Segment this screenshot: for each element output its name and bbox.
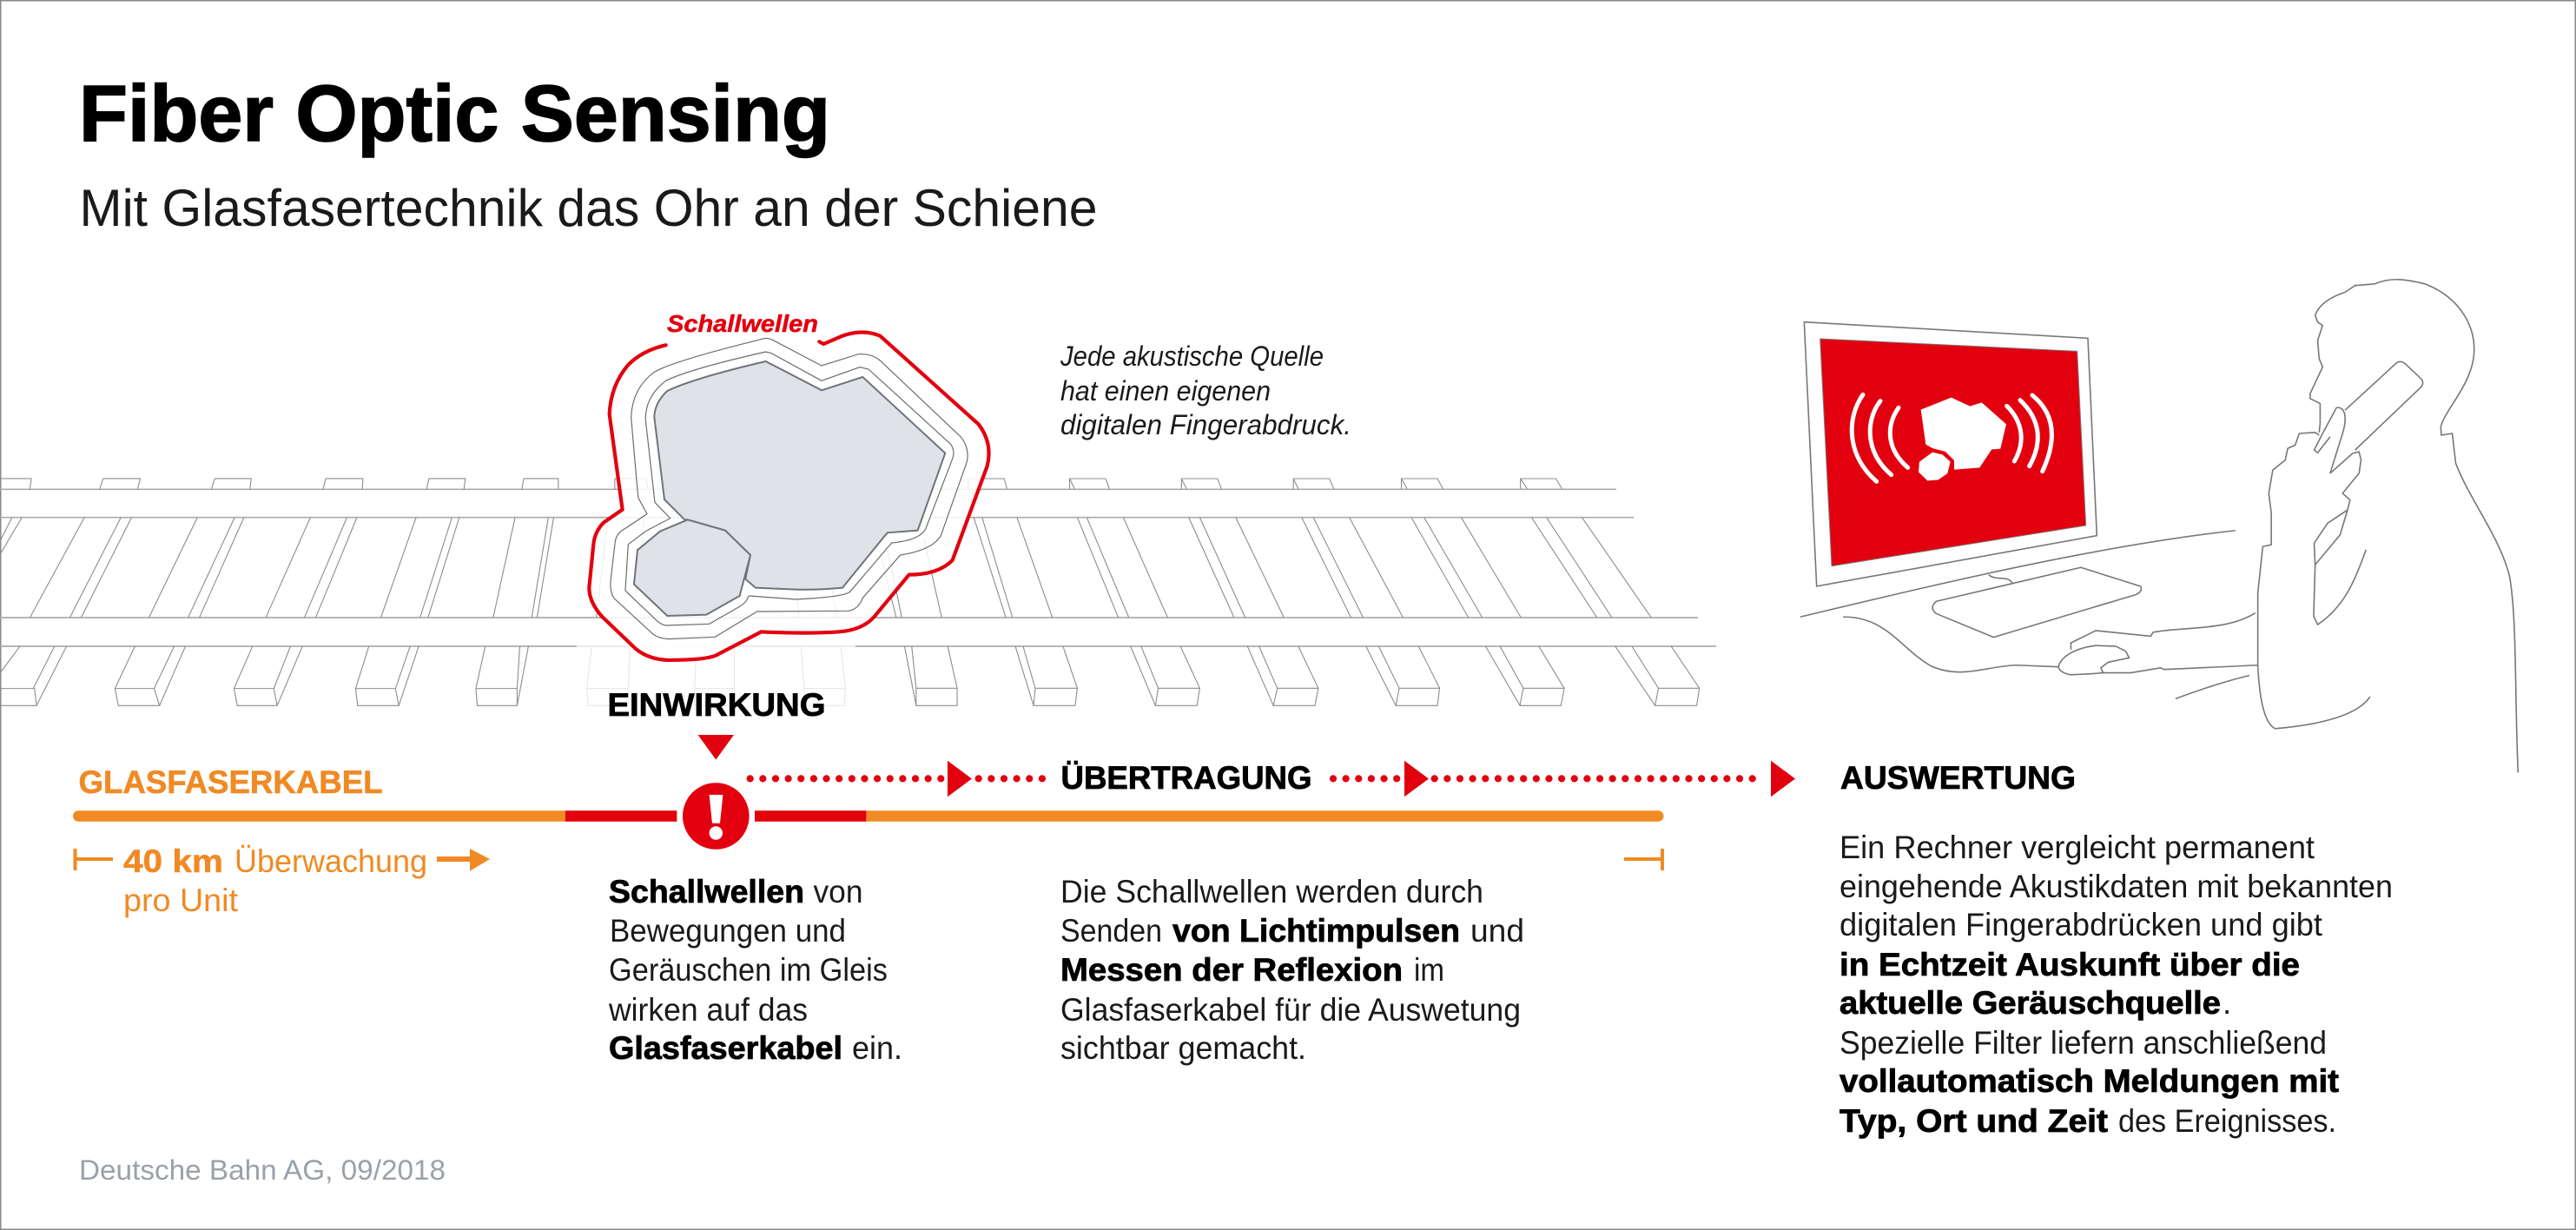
- text block: Übertragung: [1060, 874, 1524, 1066]
- text block: Einwirkung: [608, 874, 902, 1066]
- text block: Auswertung: Ein Rechner vergleicht permanent: [1840, 830, 2315, 865]
- icon: sound wave arcs: [1852, 394, 2051, 481]
- footer credit: Deutsche Bahn AG, 09/2018: [79, 1154, 446, 1186]
- text block: Übertragung: Senden: [1060, 913, 1162, 949]
- text block: Einwirkung: wirken auf das: [608, 992, 808, 1028]
- label: Schallwellen: Schallwellen: [667, 310, 818, 337]
- text block: Übertragung: Die Schallwellen werden durch: [1060, 874, 1483, 909]
- text block: Auswertung: vollautomatisch Meldungen mit: [1840, 1063, 2339, 1099]
- subtitle: Mit Glasfasertechnik das Ohr an der Schiene: [80, 179, 1098, 237]
- dotted transmission arrows: [750, 761, 1795, 797]
- text block: Übertragung: sichtbar gemacht.: [1060, 1030, 1306, 1066]
- heading: EINWIRKUNG: EINWIRKUNG: [608, 687, 825, 723]
- heading: GLASFASERKABEL: GLASFASERKABEL: [78, 764, 382, 800]
- icon: alert circle: [683, 783, 750, 850]
- note: acoustic fingerprint: Jede akustische Quelle: [1060, 341, 1324, 372]
- text block: Einwirkung: Schallwellen: [609, 874, 804, 909]
- text block: Auswertung: in Echtzeit Auskunft über die: [1840, 947, 2300, 982]
- icon: rocks: [1919, 398, 2006, 480]
- arrow: range end: [1624, 849, 1662, 870]
- text block: Übertragung: Glasfaserkabel für die Auswetung: [1060, 992, 1521, 1028]
- illustration: monitor with alert screen: [1804, 322, 2097, 586]
- heading: AUSWERTUNG: AUSWERTUNG: [1840, 760, 2076, 796]
- illustration: sound waves around rock: [589, 332, 989, 660]
- text block: Einwirkung: Bewegungen und: [610, 913, 846, 949]
- icon: pointer triangle: [698, 735, 734, 759]
- text block: Auswertung: Spezielle Filter liefern anschließend: [1840, 1025, 2327, 1061]
- text block: Einwirkung: von: [813, 874, 863, 909]
- fiber optic cable bar: [73, 809, 1664, 823]
- text block: Übertragung: im: [1414, 952, 1444, 988]
- range: 40 km monitoring per unit: 40 km: [123, 843, 223, 879]
- text block: Einwirkung: ein.: [852, 1030, 902, 1066]
- text block: Auswertung: eingehende Akustikdaten mit bekannten: [1840, 869, 2393, 904]
- text block: Auswertung: [1840, 830, 2393, 1139]
- text block: Auswertung: .: [2223, 985, 2231, 1021]
- text block: Auswertung: aktuelle Geräuschquelle: [1840, 985, 2221, 1021]
- text block: Auswertung: Typ, Ort und Zeit: [1840, 1103, 2108, 1139]
- text block: Auswertung: digitalen Fingerabdrücken und gibt: [1840, 907, 2323, 942]
- illustration: person on phone at desk: [1800, 280, 2518, 772]
- text block: Einwirkung: Geräuschen im Gleis: [609, 952, 888, 988]
- note: acoustic fingerprint: [1060, 341, 1351, 440]
- text block: Einwirkung: Glasfaserkabel: [609, 1030, 842, 1066]
- arrow: range direction: [437, 849, 490, 871]
- range: 40 km monitoring per unit: Überwachung: [234, 843, 427, 879]
- note: acoustic fingerprint: digitalen Fingerabdruck.: [1060, 409, 1351, 440]
- range: 40 km monitoring per unit: pro Unit: [123, 883, 239, 918]
- arrow: range start: [75, 849, 113, 870]
- text block: Auswertung: des Ereignisses.: [2118, 1103, 2336, 1139]
- heading: ÜBERTRAGUNG: ÜBERTRAGUNG: [1061, 760, 1311, 796]
- range: 40 km monitoring per unit: [75, 843, 1662, 918]
- text block: Übertragung: und: [1470, 913, 1524, 949]
- illustration: railway track: [0, 479, 1716, 725]
- text block: Übertragung: von Lichtimpulsen: [1172, 913, 1460, 949]
- note: acoustic fingerprint: hat einen eigenen: [1060, 375, 1271, 407]
- title: Fiber Optic Sensing: [79, 69, 830, 158]
- text block: Übertragung: Messen der Reflexion: [1060, 952, 1403, 988]
